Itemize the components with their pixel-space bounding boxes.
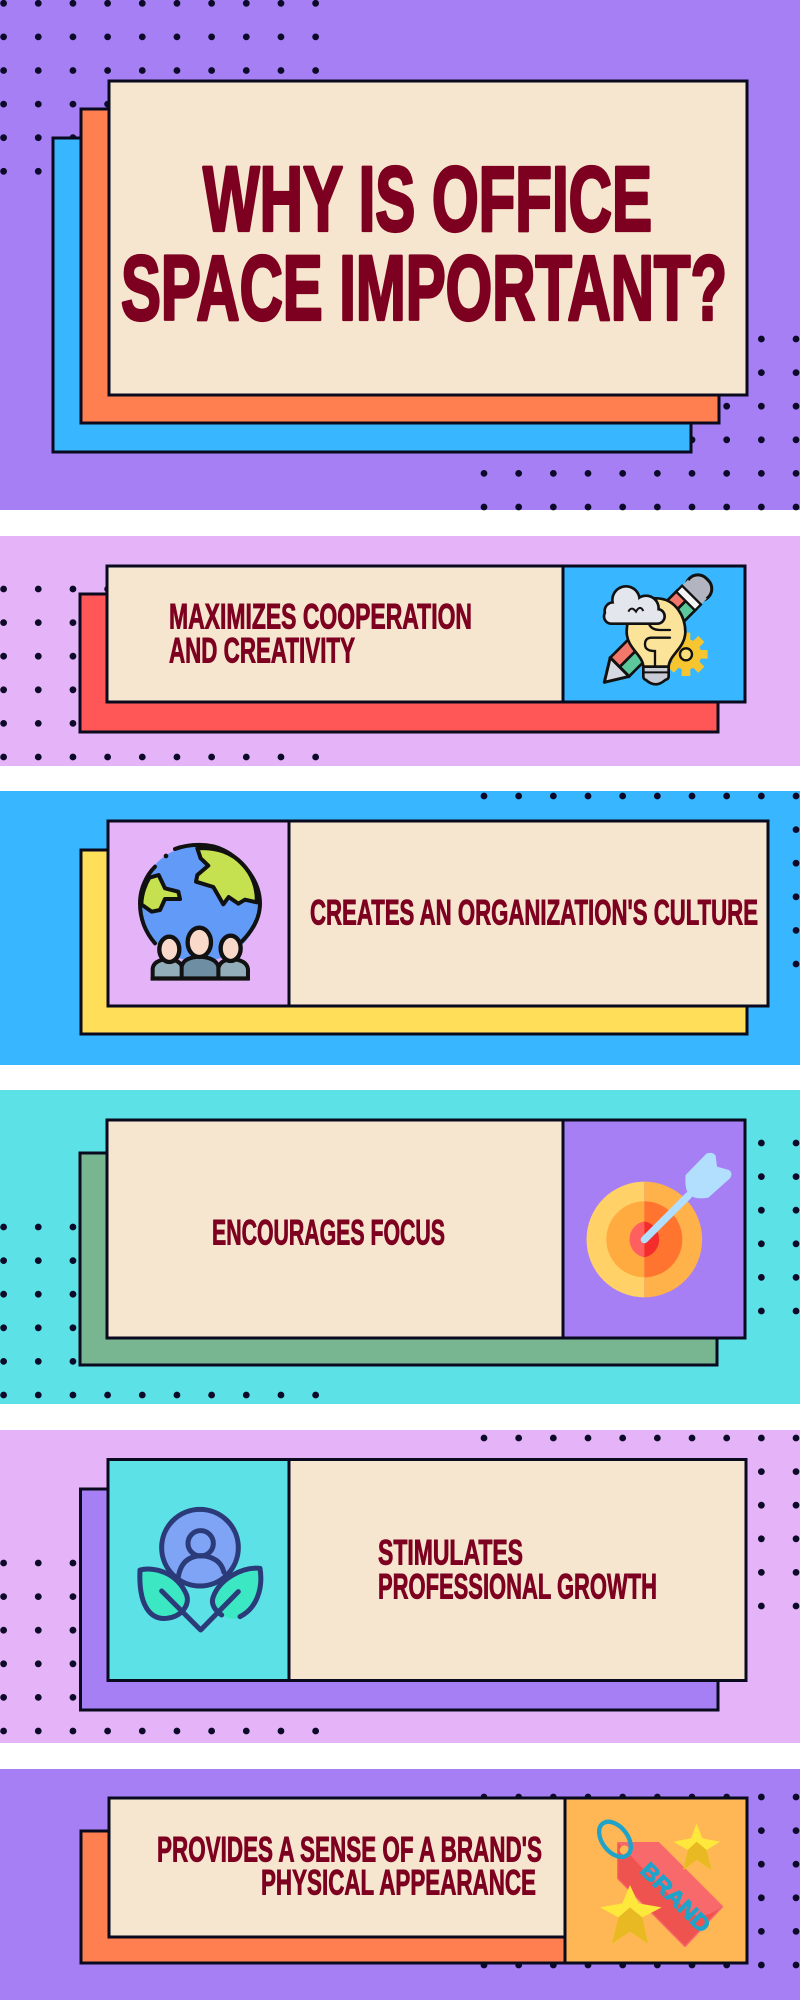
panel: brand appearance: [0, 1769, 800, 2000]
icon: brand tag with stars: BRAND: [635, 1858, 716, 1938]
panel: organization's culture: [0, 791, 800, 1065]
panel: professional growth: [0, 1430, 800, 1743]
text: maximizes cooperation: AND CREATIVITY: [169, 632, 355, 670]
panel: title header: [0, 0, 800, 510]
text: brand sense: PROVIDES A SENSE OF A BRAND'S: [157, 1830, 542, 1870]
icon: brand tag with stars: [593, 1816, 722, 1946]
text: brand sense: [157, 1830, 542, 1902]
title: [121, 148, 727, 340]
text: maximizes cooperation: MAXIMIZES COOPERATION: [169, 598, 472, 636]
text: encourages focus: ENCOURAGES FOCUS: [212, 1214, 445, 1252]
text: stimulates growth: STIMULATES: [378, 1534, 523, 1572]
text: maximizes cooperation: [169, 598, 472, 670]
text: brand sense: PHYSICAL APPEARANCE: [261, 1864, 536, 1902]
icon: target with arrow: [586, 1153, 731, 1297]
text: stimulates growth: [378, 1534, 657, 1606]
panel: cooperation and creativity: [0, 536, 800, 766]
icon: person in a leaf flower: [140, 1509, 261, 1630]
icon: globe with people: [140, 845, 260, 979]
panel: encourages focus: [0, 1090, 800, 1404]
icon: light bulb, pencil and cloud: [595, 570, 717, 692]
